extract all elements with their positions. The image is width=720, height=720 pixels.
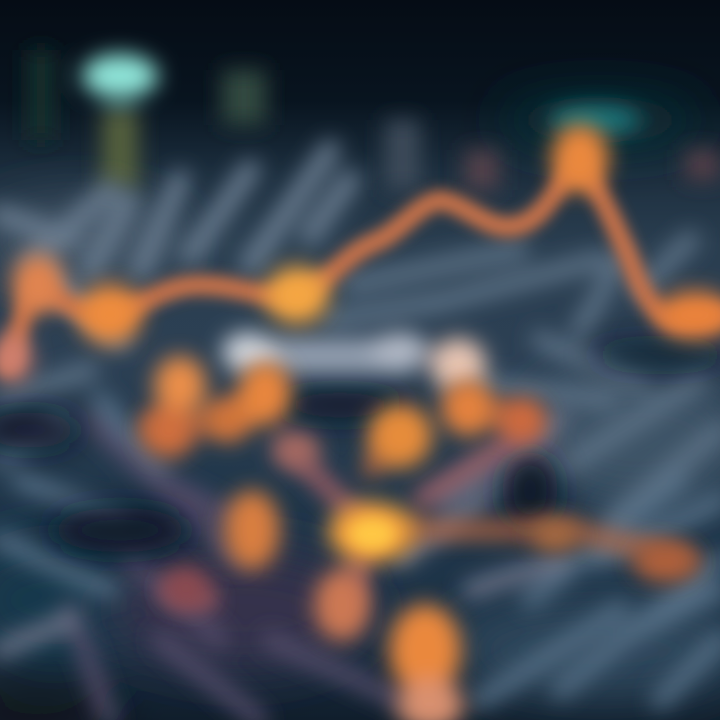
- white label smear: [222, 332, 486, 390]
- teal glow top right: [549, 106, 641, 134]
- orange trend line: [8, 165, 720, 365]
- dim bar: [222, 70, 266, 125]
- soft shadows: [0, 345, 720, 552]
- upper glow bars: [28, 50, 720, 190]
- lower orange cluster: [150, 395, 690, 610]
- hot spot core: [350, 519, 394, 549]
- trend line nodes: [0, 124, 720, 382]
- olive bar under glow: [102, 108, 138, 190]
- teal glow top left: [82, 54, 158, 98]
- slate streaks: [0, 150, 720, 720]
